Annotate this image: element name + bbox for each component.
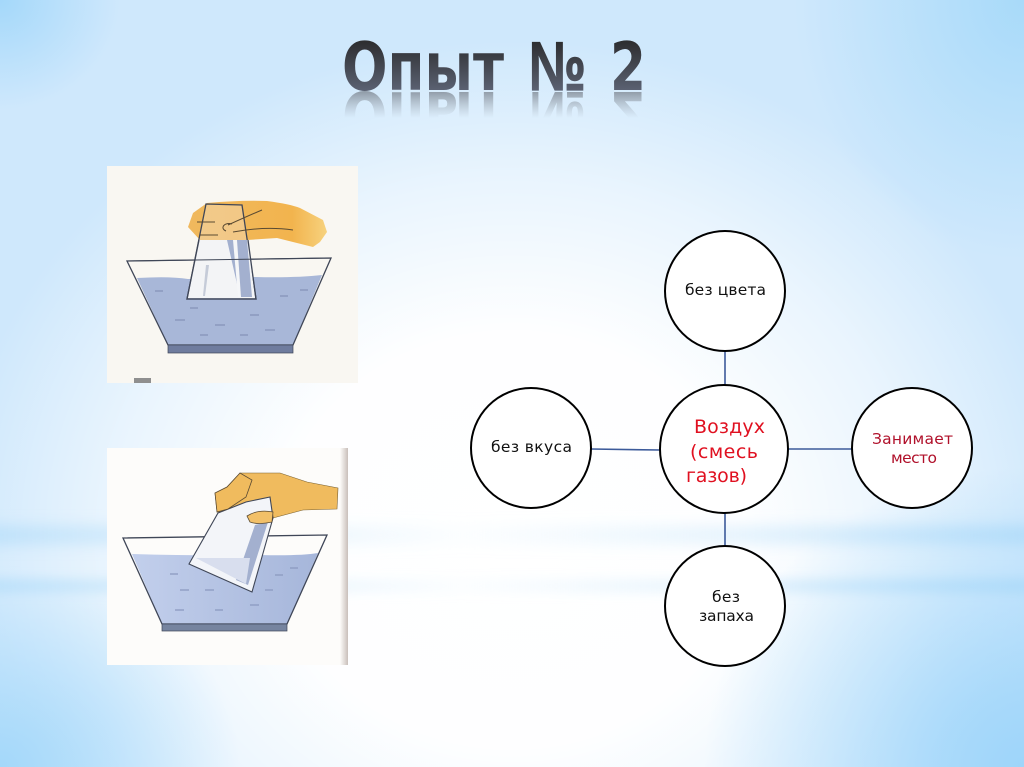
hand xyxy=(188,201,327,247)
page number fragment xyxy=(134,378,151,383)
illustration: glass held straight over water xyxy=(107,166,358,383)
glass outline over fill xyxy=(187,240,256,299)
glass lower interior xyxy=(188,240,255,298)
diagram node: Воздух: (смесь xyxy=(690,441,758,463)
title: № xyxy=(529,28,586,105)
title reflection: 2 xyxy=(610,76,646,154)
glass xyxy=(189,497,273,592)
diagram node: без запаха xyxy=(665,546,785,666)
basin outline xyxy=(123,535,327,624)
hand xyxy=(215,473,338,522)
connector lines xyxy=(591,350,853,546)
thumb xyxy=(247,511,273,524)
water ripples xyxy=(155,290,308,335)
basin water xyxy=(132,553,318,624)
diagram node: Воздух: Воздух xyxy=(694,416,765,438)
diagram node: Воздух xyxy=(660,385,788,513)
diagram node: Занимает место: Занимает xyxy=(872,430,953,448)
fingers xyxy=(215,473,252,512)
basin outline xyxy=(127,258,331,345)
title: 2 xyxy=(610,28,646,106)
glass highlight xyxy=(227,240,252,297)
basin base xyxy=(162,624,287,631)
glass highlight xyxy=(236,522,268,585)
basin base xyxy=(168,345,293,353)
title reflection: № xyxy=(529,77,586,154)
diagram node: без вкуса: без вкуса xyxy=(491,438,572,456)
diagram node: без цвета xyxy=(665,231,785,351)
title reflection xyxy=(342,76,646,154)
diagram node: без вкуса xyxy=(471,388,591,508)
basin water xyxy=(137,275,322,345)
diagram node: без запаха: без xyxy=(712,588,740,606)
glass xyxy=(187,204,256,299)
illustration: tilted glass in water xyxy=(107,448,348,665)
finger lines xyxy=(197,210,293,235)
diagram node: Занимает место xyxy=(852,388,972,508)
diagram node: Воздух: газов) xyxy=(686,465,747,487)
water ripples xyxy=(170,568,298,610)
title: Опыт xyxy=(342,28,504,106)
title reflection: Опыт xyxy=(342,76,504,154)
title xyxy=(342,28,646,154)
diagram node: без запаха: запаха xyxy=(699,607,754,625)
diagram node: Занимает место: место xyxy=(891,449,937,467)
diagram node: без цвета: без цвета xyxy=(685,281,766,299)
